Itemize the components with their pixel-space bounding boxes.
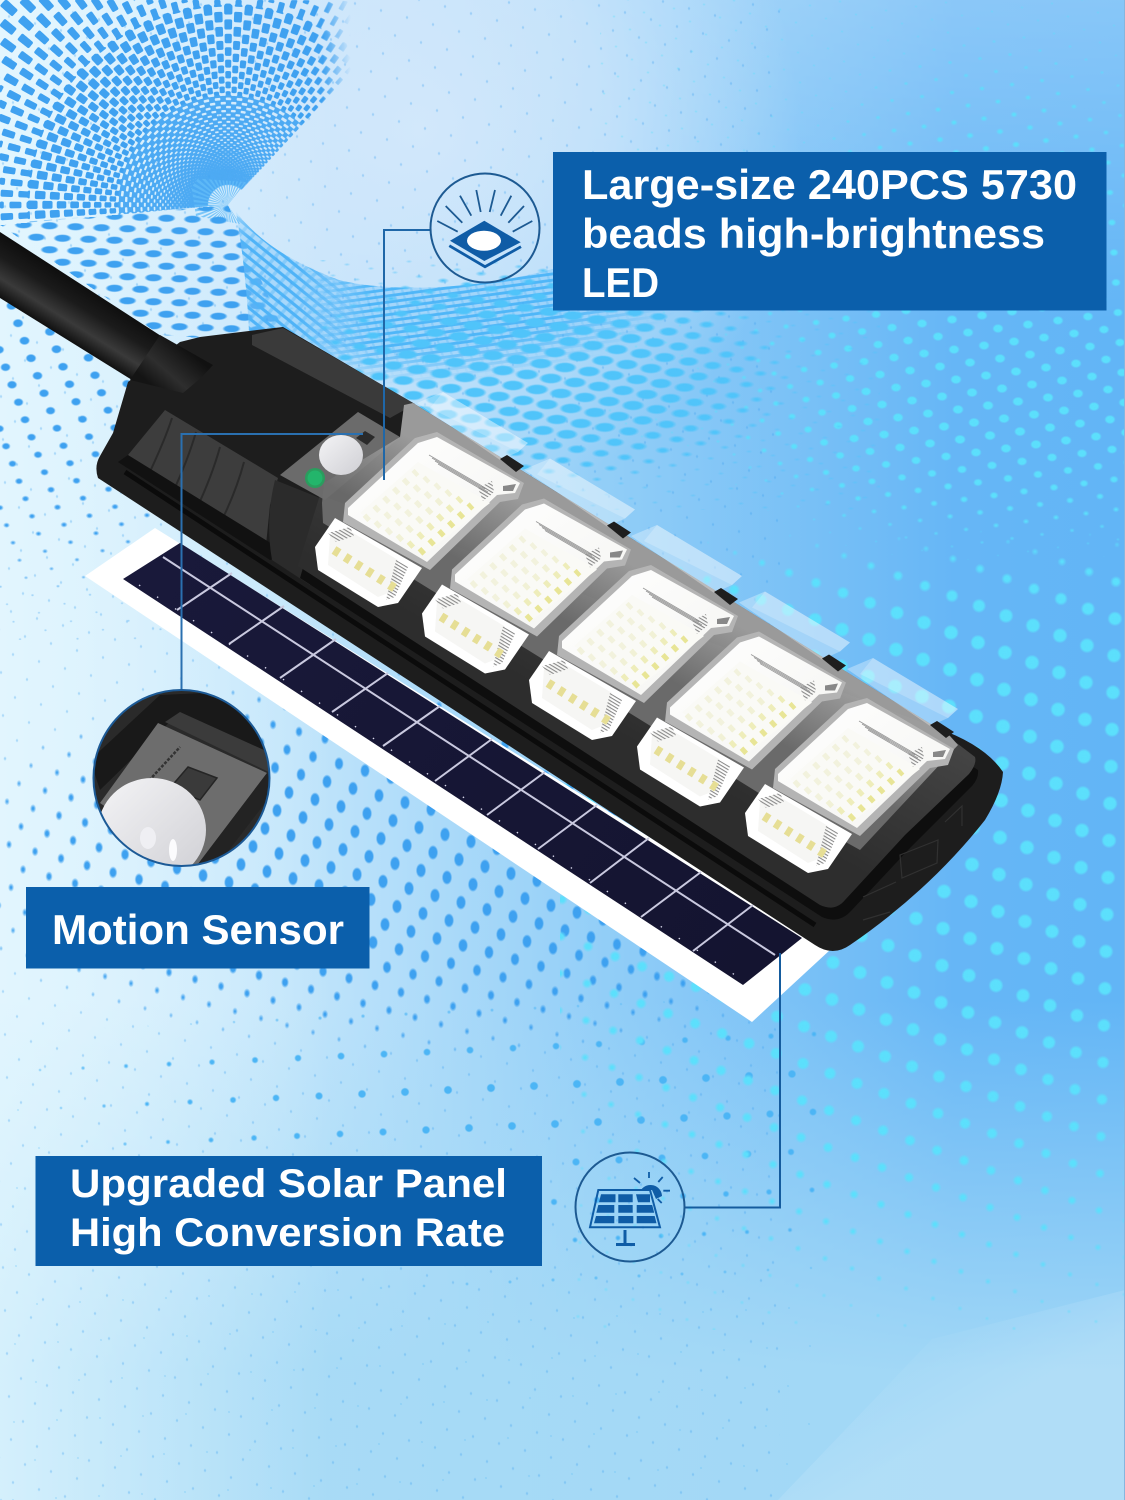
sensor plate — [280, 412, 400, 500]
halftone dots: lower field — [0, 1000, 820, 1500]
solar panel — [85, 528, 830, 1022]
lamp pole — [0, 232, 175, 388]
label: solar panel: Upgraded Solar Panel — [70, 1162, 507, 1206]
leader line: motion sensor — [182, 434, 363, 692]
halftone swirl top left — [0, 0, 349, 338]
inset: motion sensor close-up — [92, 689, 270, 867]
lamp body — [96, 327, 1003, 951]
LED module 1 — [315, 392, 528, 607]
right edge hairline — [1124, 0, 1125, 1500]
label: motion sensor: Motion Sensor — [52, 906, 344, 953]
LED module 5 — [745, 658, 958, 873]
leader line: LED — [384, 230, 431, 480]
label: LED — [553, 152, 1106, 310]
label: solar panel: High Conversion Rate — [70, 1211, 505, 1255]
halftone dots: left of pole — [0, 302, 162, 640]
halftone dots: cyan upper right — [600, 0, 1125, 560]
halftone dots: cyan right — [560, 530, 1125, 1330]
label: motion sensor — [26, 887, 370, 968]
icon: LED chip — [430, 174, 540, 282]
LED module 2 — [422, 458, 635, 674]
label: LED: Large-size 240PCS 5730 — [582, 161, 1077, 208]
leader line: solar panel — [685, 953, 780, 1208]
label: LED: beads high-brightness — [582, 210, 1045, 257]
halftone dots: packed ellipses beneath LED label — [280, 260, 880, 510]
halftone dots: blue field under panel — [0, 0, 780, 1500]
icon: solar panel with sun — [576, 1152, 684, 1262]
label: solar panel — [36, 1156, 542, 1266]
LED module 4 — [637, 592, 850, 806]
pole collar — [130, 335, 213, 393]
woven mesh wave — [236, 212, 663, 382]
translucent grey top band — [322, 403, 958, 850]
motion sensor dome — [319, 435, 363, 475]
LED module 3 — [529, 525, 742, 740]
label: LED: LED — [582, 259, 659, 306]
